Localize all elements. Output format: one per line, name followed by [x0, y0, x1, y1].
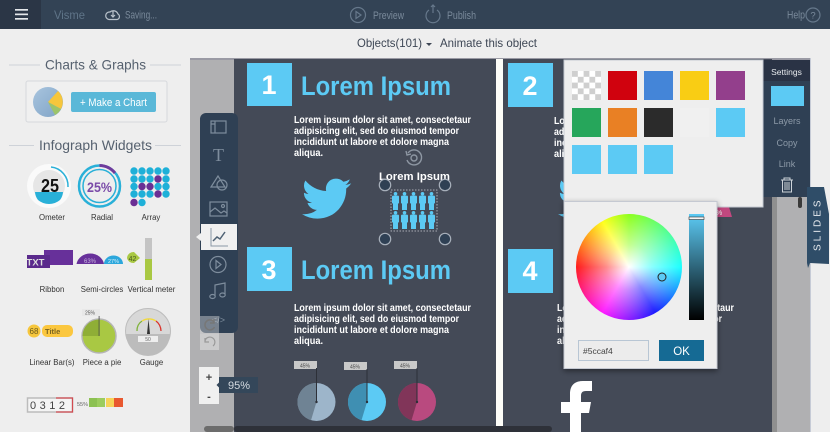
ok button: [659, 340, 704, 361]
pie chart 2: [344, 362, 386, 421]
current colour swatch: [771, 86, 804, 106]
zoom control: [199, 367, 258, 404]
settings panel: Link: [779, 159, 796, 169]
pie chart 3: 45%: [400, 364, 411, 370]
slides tab: [807, 187, 829, 268]
preview button: [350, 8, 404, 22]
section 2 text: Lorem ipsum dolor sit amet, consectetaur: [554, 116, 731, 127]
section 3 heading: Lorem Ipsum: [301, 255, 451, 285]
widget: piece a pie: [82, 309, 121, 367]
icon: twitter bird: [302, 179, 351, 219]
section 3 number: [247, 247, 292, 291]
selected people widget: [379, 179, 451, 245]
selected widget label: Lorem Ipsum: [379, 171, 450, 183]
top bar: [0, 0, 830, 29]
help button: Help: [787, 10, 805, 22]
icon: trash: [781, 178, 793, 192]
icon: shapes tool: [211, 176, 227, 190]
slides tab: SLIDES: [812, 197, 824, 251]
help button: ?: [810, 10, 816, 22]
widget: segmented meter: 55%: [77, 402, 88, 408]
icon: rotate handle: [406, 150, 422, 165]
pink tag: %: [716, 210, 722, 217]
section 1 heading: Lorem Ipsum: [301, 71, 451, 101]
widget: ribbon: TXT: [27, 258, 45, 268]
icon: twitter bird 2: [558, 179, 607, 219]
objects toolbar: Objects(101): [357, 36, 422, 50]
saving status: Saving...: [125, 10, 157, 22]
widget: linear bars: 68: [30, 327, 39, 336]
section 2 text: aliqua.: [554, 149, 583, 160]
make a chart card: + Make a Chart: [80, 97, 147, 109]
brightness slider: [689, 214, 704, 320]
objects toolbar: [357, 36, 538, 50]
tools panel: [196, 113, 238, 333]
widget: vertical meter: Vertical meter: [128, 285, 176, 294]
widget: counter: 0312: [30, 400, 68, 412]
section 3 text: [294, 303, 471, 347]
widget: gauge: 50: [145, 337, 151, 343]
horizontal scrollbar: [204, 426, 552, 432]
section 4 number: [508, 249, 553, 293]
zoom control: 95%: [228, 380, 250, 392]
section 1 text: Lorem ipsum dolor sit amet, consectetaur: [294, 115, 471, 126]
widget: linear bars: [28, 324, 75, 367]
colour swatches panel: [564, 60, 763, 207]
section 3 text: Lorem ipsum dolor sit amet, consectetaur: [294, 303, 471, 314]
pink tag: [700, 207, 732, 217]
section 1 number: [247, 63, 292, 106]
widget: gauge: [126, 308, 170, 367]
section 2 text: adipisicing elit, sed do eiusmod tempor: [554, 127, 719, 138]
section 2 number: 2: [522, 71, 538, 101]
widget: array: Array: [142, 213, 160, 222]
widget: radial: 25%: [87, 179, 112, 195]
icon: layout tool: [211, 121, 226, 133]
section 4 text: incididunt ut labore et dolore magna: [557, 325, 712, 336]
settings panel: [763, 60, 810, 197]
pie chart 2: 45%: [350, 364, 361, 370]
section 1 text: [294, 115, 471, 159]
publish button: [426, 5, 476, 23]
section 2 number: [508, 63, 553, 107]
widget: vertical meter: [127, 238, 176, 294]
widget: piece a pie: 25%: [85, 310, 96, 316]
widget: linear bars: Linear Bar(s): [29, 358, 75, 367]
section 3 number: 3: [261, 255, 277, 285]
preview button: Preview: [373, 10, 404, 22]
icon: facebook f: [561, 381, 592, 432]
help button: [787, 8, 820, 22]
widget: semi-circles: [76, 253, 123, 294]
widget: ribbon: Ribbon: [40, 285, 64, 294]
icon: menu: [15, 9, 28, 20]
section 4 number: 4: [522, 256, 538, 286]
section 1 number: 1: [261, 70, 277, 100]
pie chart 1: 45%: [300, 364, 311, 370]
zoom control: +: [206, 372, 212, 384]
colour wheel: [576, 214, 682, 320]
hex input: #5ccaf4: [583, 346, 613, 356]
section 1 text: incididunt ut labore et dolore magna: [294, 137, 449, 148]
widget: semi-circles: 63%: [84, 259, 97, 265]
section 1 text: adipisicing elit, sed do eiusmod tempor: [294, 126, 459, 137]
section 2 text: incididunt ut labore et dolore magna: [554, 138, 709, 149]
infographic page: [234, 59, 772, 432]
settings panel: Copy: [776, 138, 798, 148]
logo text: Visme: [54, 8, 85, 22]
icon: music tool: [210, 283, 225, 298]
pie charts row: [294, 361, 436, 421]
canvas area: [190, 58, 811, 432]
widget: semi-circles: 27%: [108, 259, 119, 265]
widget: gauge: Gauge: [140, 358, 163, 367]
zoom control: -: [207, 391, 211, 403]
widget: ometer: [27, 164, 71, 222]
widget: vertical meter: 42: [129, 256, 136, 263]
widget: linear bars: Title: [45, 327, 60, 336]
icon: charts tool selected: [196, 224, 237, 250]
heading: charts and graphs: Charts & Graphs: [45, 56, 146, 72]
wheel handle: [658, 273, 666, 281]
section 1 text: aliqua.: [294, 148, 323, 159]
colour picker panel: [564, 202, 717, 368]
hex input: [578, 340, 648, 360]
icon: video tool: [210, 256, 226, 272]
vertical scrollbar: [798, 197, 802, 208]
widget: ribbon: [27, 250, 73, 294]
settings panel: Settings: [771, 67, 802, 77]
widget: array: [130, 167, 170, 222]
section 3 text: incididunt ut labore et dolore magna: [294, 325, 449, 336]
icon: cloud: [106, 11, 119, 20]
widget: segmented meter: [77, 398, 123, 408]
widget: piece a pie: Piece a pie: [83, 358, 121, 367]
make a chart card: [26, 81, 167, 122]
section 4 text: adipisicing elit, sed do eiusmod tempor: [557, 314, 722, 325]
widget: ometer: Ometer: [39, 213, 65, 222]
icon: text tool: T: [213, 145, 224, 165]
widget: radial: Radial: [91, 213, 113, 222]
widget: ometer: 25: [41, 176, 59, 196]
icon: embed tool: </>: [212, 315, 225, 325]
section 3 text: aliqua.: [294, 336, 323, 347]
widget: radial: [79, 166, 120, 222]
section 4 text: aliqua.: [557, 336, 586, 347]
publish button: Publish: [447, 10, 476, 22]
section 4 text: [557, 303, 734, 347]
icon: image tool: [210, 202, 227, 216]
heading: infograph widgets: Infograph Widgets: [39, 137, 152, 153]
widget: semi-circles: Semi-circles: [81, 285, 123, 294]
settings panel: Layers: [773, 116, 801, 126]
ok button: OK: [673, 346, 690, 358]
section 3 text: adipisicing elit, sed do eiusmod tempor: [294, 314, 459, 325]
pie chart 3: [394, 361, 436, 421]
swatches: [572, 71, 745, 174]
left sidebar: [9, 56, 181, 412]
redo and undo buttons: [200, 316, 219, 350]
pie chart 1: [294, 361, 336, 421]
section 4 text: Lorem ipsum dolor sit amet, consectetaur: [557, 303, 734, 314]
swatch: transparent: [572, 71, 601, 100]
objects toolbar: Animate this object: [440, 36, 538, 50]
section 2 text: [554, 116, 731, 160]
